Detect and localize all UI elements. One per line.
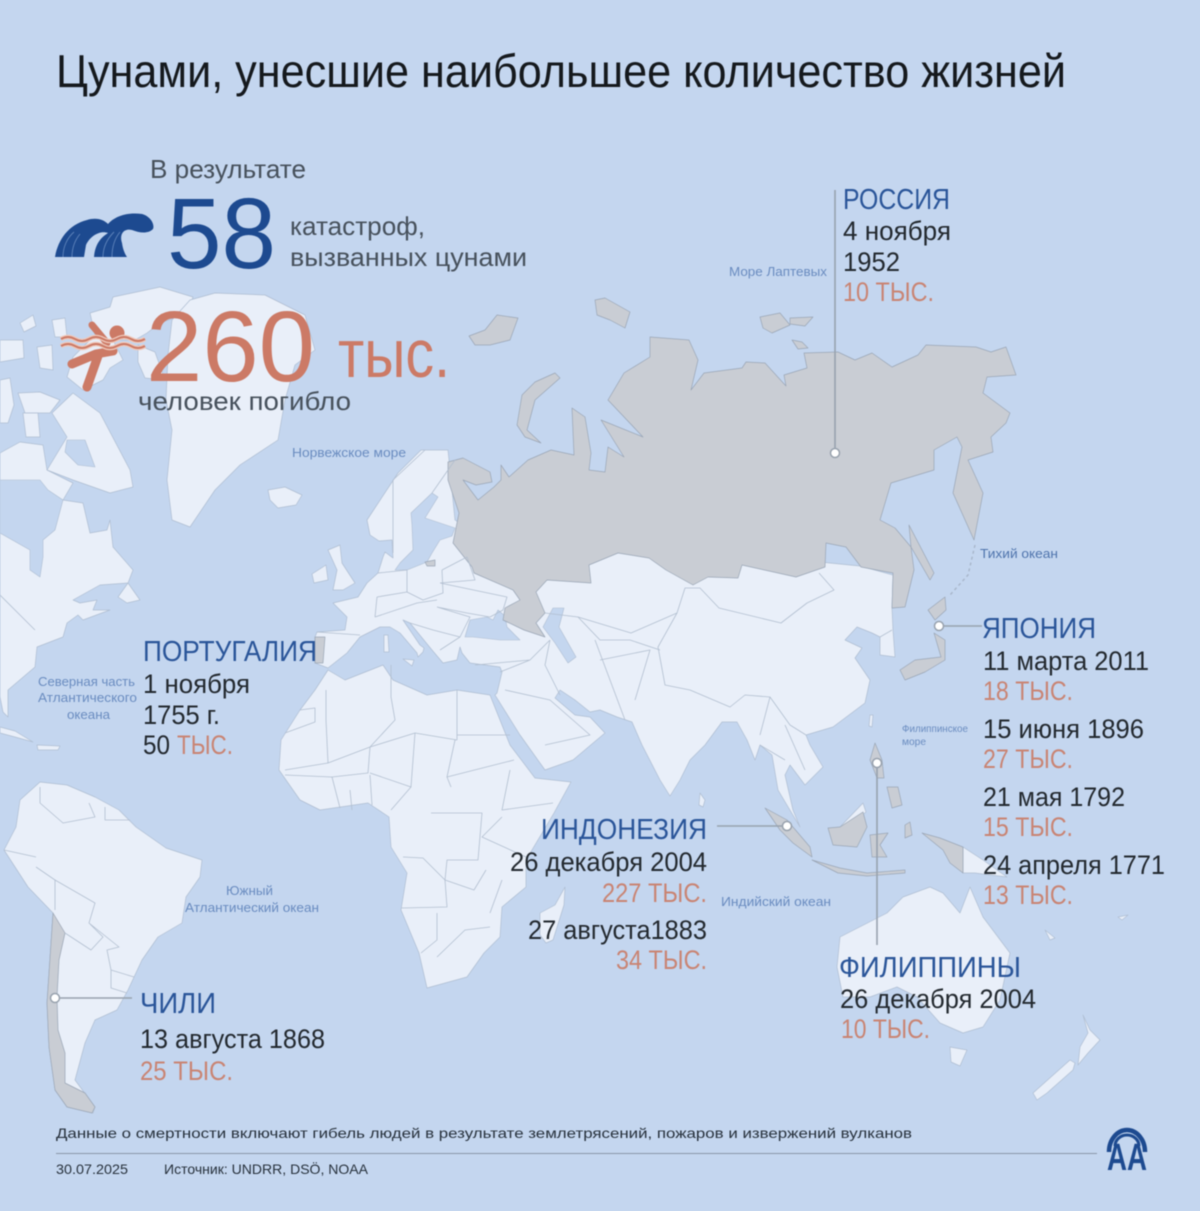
leader line and marker: Japan <box>934 622 982 630</box>
summary: disasters count: катастроф, <box>290 211 425 241</box>
label: Portugal: 1755 г. <box>143 700 220 730</box>
countries highlighted: Chile <box>47 913 95 1113</box>
country borders <box>0 450 892 993</box>
footer note: Данные о смертности включают гибель людей в результате землетрясений, пожаров и извержений вулканов <box>56 1125 912 1141</box>
summary: disasters count <box>55 154 527 290</box>
logo: AA <box>1107 1130 1147 1179</box>
sea labels: Атлантического <box>38 691 137 705</box>
sea labels: Индийский океан <box>721 895 831 909</box>
sea labels: Тихий океан <box>980 547 1058 561</box>
summary: death toll <box>61 291 450 416</box>
countries highlighted: Russia <box>425 298 1016 637</box>
leader line and marker: Philippines <box>872 758 882 945</box>
sea labels: Филиппинское <box>902 724 968 735</box>
label: Japan: 18 ТЫС. <box>983 676 1073 706</box>
label: Russia: 10 ТЫС. <box>843 277 934 307</box>
leader line and marker: Chile <box>50 994 132 1002</box>
water: Foxe Basin <box>65 440 95 467</box>
water: Hudson Bay <box>0 480 63 577</box>
label: Japan: 11 марта 2011 <box>983 646 1149 676</box>
label: Portugal: ПОРТУГАЛИЯ <box>143 636 317 668</box>
footer date and source: 30.07.2025 <box>56 1161 128 1177</box>
countries highlighted: Portugal <box>315 637 325 663</box>
label: Russia: 4 ноября <box>843 216 951 246</box>
leader line and marker: Russia <box>830 190 840 458</box>
label: Russia: РОССИЯ <box>843 184 950 216</box>
label: Portugal <box>143 636 317 760</box>
label: Indonesia: 27 августа1883 <box>528 915 707 945</box>
label: Portugal: ТЫС. <box>177 730 233 760</box>
world map <box>0 287 1128 1113</box>
summary: death toll: 260 <box>146 291 315 403</box>
water: Black Sea <box>465 610 520 640</box>
icon: tsunami wave <box>55 213 153 257</box>
label: Japan: 15 июня 1896 <box>983 714 1144 744</box>
label: Philippines: ФИЛИППИНЫ <box>839 952 1021 984</box>
label: Japan: 15 ТЫС. <box>983 812 1073 842</box>
sea labels: Море Лаптевых <box>729 265 828 279</box>
landmass: Madagascar <box>540 887 565 943</box>
label: Indonesia: ИНДОНЕЗИЯ <box>541 814 707 846</box>
summary: death toll: тыс. <box>338 316 450 392</box>
footer date and source <box>56 1160 369 1177</box>
label: Chile: 25 ТЫС. <box>140 1056 233 1086</box>
label: Indonesia: 26 декабря 2004 <box>510 847 707 877</box>
label: Japan: ЯПОНИЯ <box>982 613 1096 645</box>
label: Chile: ЧИЛИ <box>140 988 216 1020</box>
label: Indonesia: 227 ТЫС. <box>602 878 707 908</box>
label: Russia <box>843 184 951 307</box>
icon: drowning person <box>61 325 145 387</box>
sea labels: море <box>902 737 926 748</box>
sea labels: Норвежское море <box>292 446 406 460</box>
leader line and marker: Indonesia <box>717 822 792 830</box>
countries highlighted: Indonesia and Philippines <box>765 743 963 876</box>
logo: AA: AA <box>1107 1137 1147 1179</box>
summary: disasters count: В результате <box>150 154 306 184</box>
label: Indonesia: 34 ТЫС. <box>616 945 707 975</box>
label: Japan: 13 ТЫС. <box>983 880 1073 910</box>
landmass: European islands <box>312 545 414 666</box>
landmass: North America and Arctic islands <box>0 287 193 750</box>
label: Japan: 27 ТЫС. <box>983 744 1073 774</box>
label: Philippines: 26 декабря 2004 <box>840 984 1036 1014</box>
sea labels: Северная часть <box>38 675 135 689</box>
summary: disasters count: 58 <box>167 178 276 290</box>
sea labels: Южный <box>226 884 273 898</box>
sea labels <box>38 265 1058 915</box>
landmass: Greenland and Iceland <box>166 293 315 527</box>
water: Caspian Sea <box>543 608 576 663</box>
label: Philippines <box>839 952 1036 1044</box>
label: Japan: 24 апреля 1771 <box>983 850 1165 880</box>
landmass: South America <box>4 782 202 1113</box>
label: Portugal: 1 ноября <box>143 669 250 699</box>
water: Baltic Sea <box>395 493 455 570</box>
label: Japan: 21 мая 1792 <box>983 782 1125 812</box>
summary: death toll: человек погибло <box>138 386 351 416</box>
sea labels: океана <box>67 708 110 722</box>
title: Цунами, унесшие наибольшее количество жизней <box>56 45 1066 97</box>
landmass: Africa <box>279 665 571 988</box>
sea labels: Атлантический океан <box>185 901 319 915</box>
summary: disasters count: вызванных цунами <box>290 242 527 272</box>
label: Russia: 1952 <box>843 247 900 277</box>
label: Indonesia <box>510 814 707 975</box>
label: Portugal: 50 <box>143 730 170 760</box>
label: Chile <box>140 988 325 1086</box>
countries highlighted: Japan <box>900 597 946 680</box>
label: Philippines: 10 ТЫС. <box>841 1014 930 1044</box>
landmass: Australia and Oceania <box>699 715 1128 1100</box>
landmass: Eurasia <box>315 450 895 827</box>
label: Japan <box>982 613 1165 910</box>
Kuril islands <box>950 545 975 595</box>
label: Chile: 13 августа 1868 <box>140 1024 325 1054</box>
footer date and source: Источник: UNDRR, DSÖ, NOAA <box>164 1160 369 1177</box>
